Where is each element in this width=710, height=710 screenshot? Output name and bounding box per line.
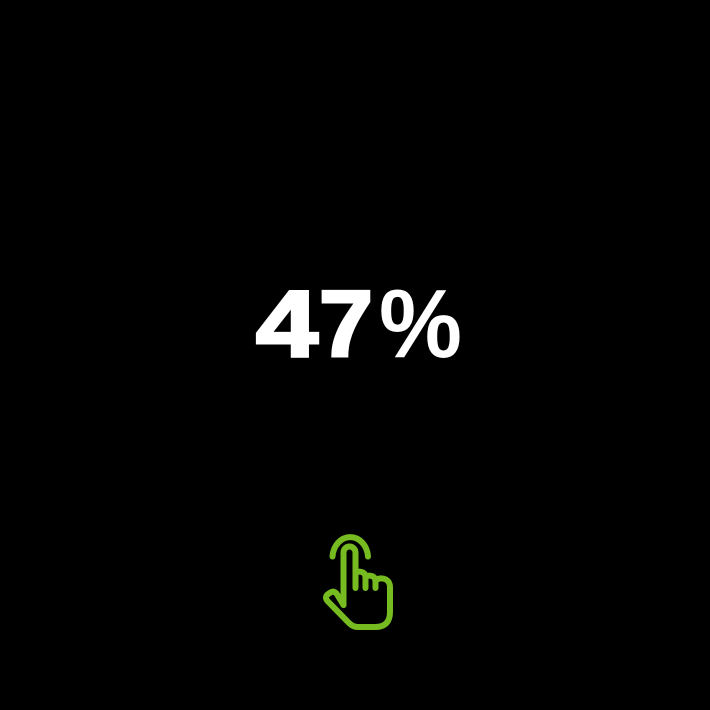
- statistic: 47%: [256, 269, 462, 378]
- icon: tapping hand: [326, 537, 390, 627]
- statistic: 47%: 4: [256, 271, 318, 376]
- statistic: 47%: %: [379, 269, 462, 378]
- statistic: 47%: 7: [319, 271, 373, 376]
